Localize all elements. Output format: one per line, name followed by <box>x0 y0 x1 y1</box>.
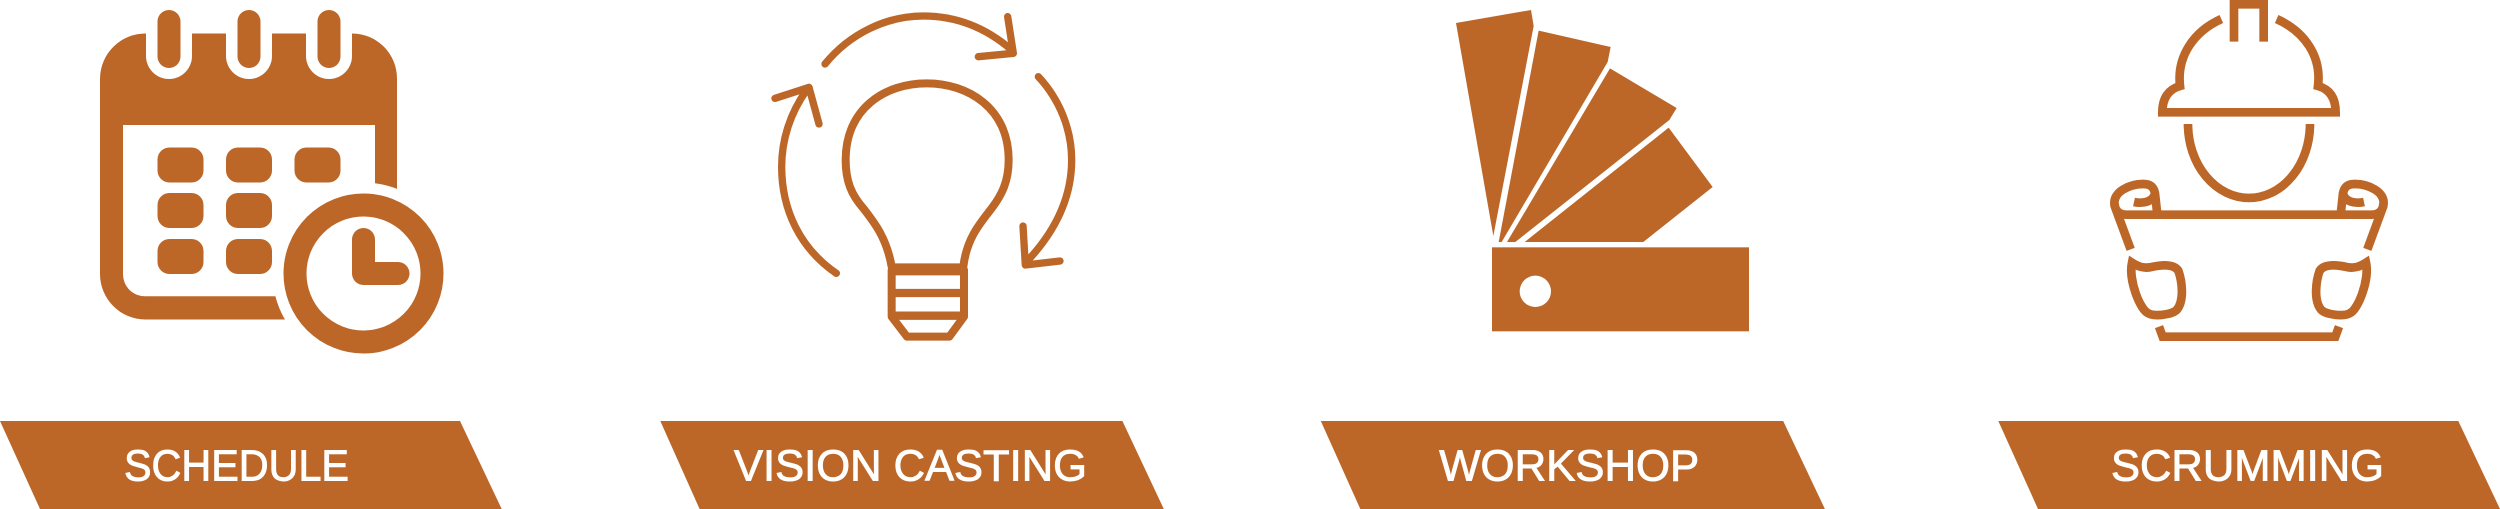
banner: scrumming: SCRUMMING <box>2111 442 2384 490</box>
binder rings <box>158 10 340 68</box>
swatch 2 <box>1499 31 1611 242</box>
swatch base <box>1492 247 1749 331</box>
top arrow <box>825 16 1013 64</box>
face <box>2188 124 2310 198</box>
panel: schedule <box>0 10 502 509</box>
banner: scrumming <box>1998 421 2500 509</box>
hard hat <box>2162 4 2336 112</box>
bulb base <box>892 269 964 337</box>
panel: workshop <box>1321 10 1825 509</box>
right arrow <box>1023 77 1072 265</box>
banner: schedule <box>0 421 502 509</box>
date grid <box>158 148 340 274</box>
swatch 4 <box>1525 128 1713 242</box>
icon: light bulb with cycle arrows <box>775 16 1072 337</box>
icon: calendar with clock <box>100 10 454 364</box>
banner: workshop <box>1321 421 1825 509</box>
left hand <box>2131 263 2182 315</box>
banner: schedule: SCHEDULE <box>124 442 349 490</box>
banner: vision casting: VISION CASTING <box>734 442 1087 490</box>
swatch hole <box>1520 276 1551 307</box>
bulb glass <box>846 83 1009 267</box>
left arrow <box>775 87 836 273</box>
banner: vision casting <box>660 421 1164 509</box>
swatch 3 <box>1507 68 1677 242</box>
calendar body <box>100 33 397 320</box>
panel: scrumming <box>1998 4 2500 509</box>
blueprint <box>2114 184 2384 337</box>
icon: engineer reading plans <box>2114 4 2384 337</box>
panel: vision casting <box>660 16 1164 509</box>
icon: swatch fan <box>1456 10 1749 331</box>
banner: workshop: WORKSHOP <box>1439 442 1699 490</box>
right hand <box>2316 263 2367 315</box>
calendar page <box>123 125 375 296</box>
swatch 1 <box>1456 10 1534 236</box>
clock <box>272 182 454 364</box>
